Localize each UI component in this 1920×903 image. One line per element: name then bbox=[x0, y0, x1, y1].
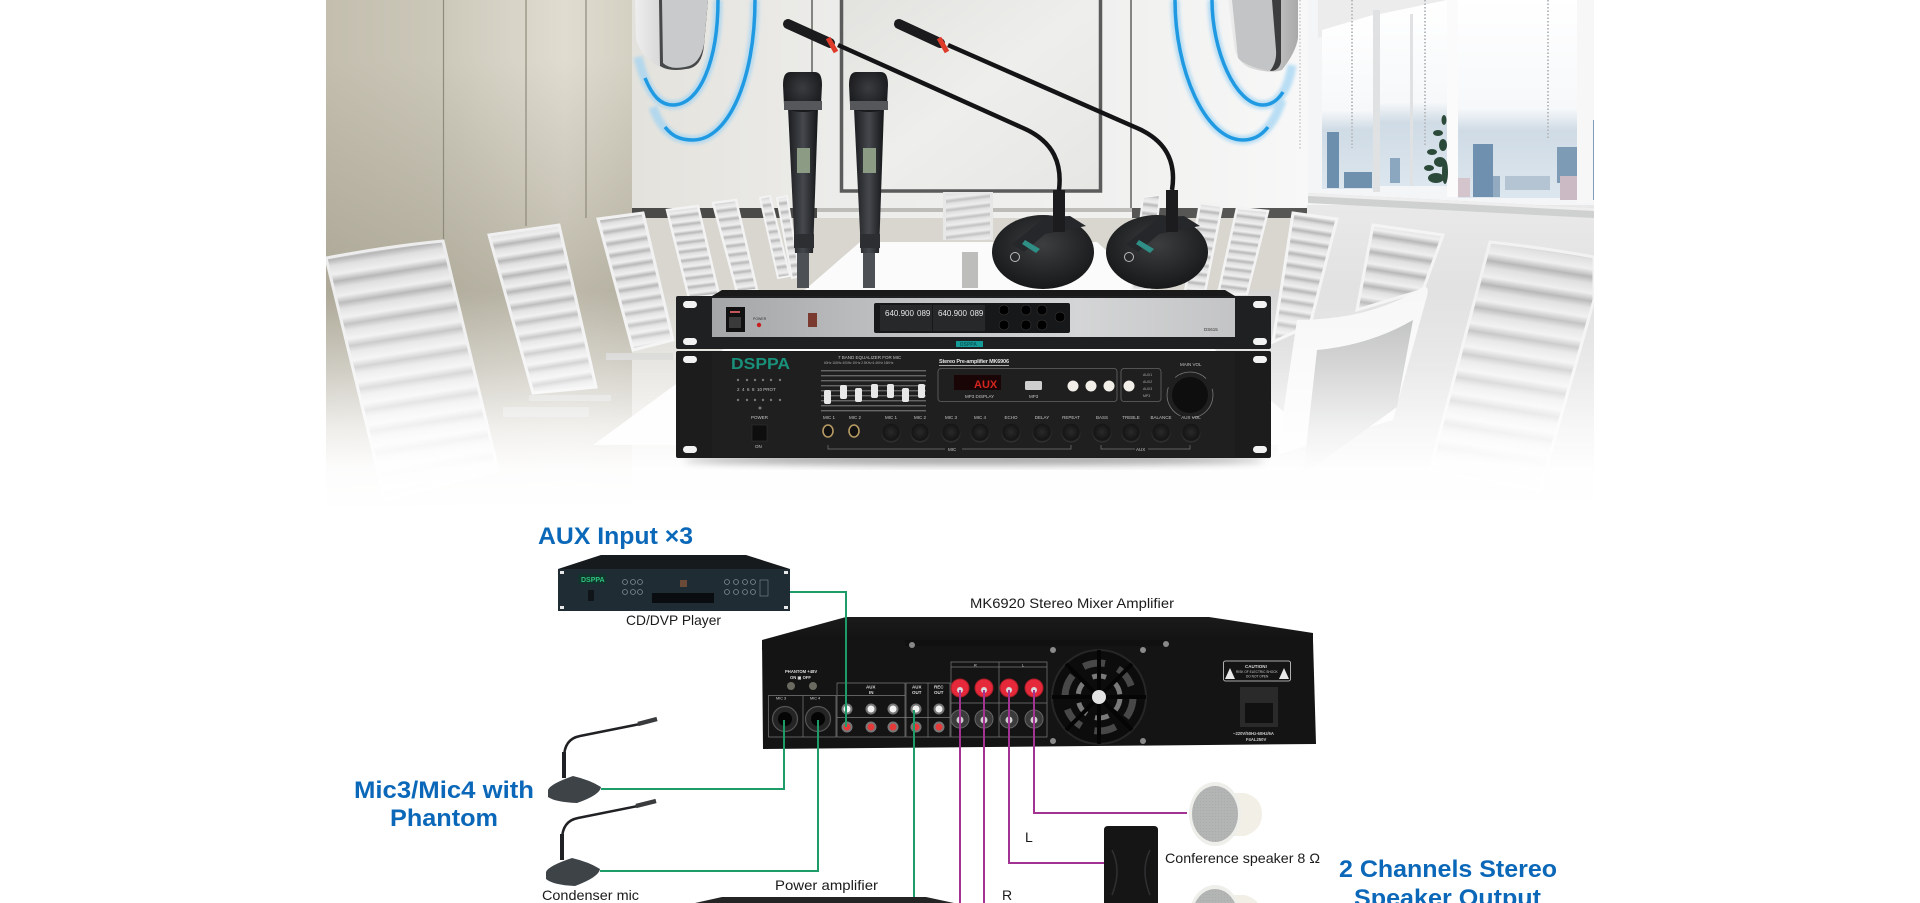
rack shadow bbox=[684, 455, 1264, 465]
control knobs: DELAY bbox=[1035, 415, 1049, 420]
XLR inputs: MIC 4 bbox=[810, 696, 820, 700]
heading: Mic3/Mic4 with Phantom: Phantom bbox=[390, 805, 498, 832]
connection diagram bbox=[354, 523, 1557, 903]
MK6920 stereo mixer amplifier rear panel bbox=[762, 617, 1316, 749]
power switch bbox=[726, 307, 745, 332]
mic and aux group brackets: MIC bbox=[948, 447, 957, 452]
control knobs: BALANCE bbox=[1150, 415, 1172, 420]
RCA connectors: AUX bbox=[912, 684, 922, 690]
caution label: RISK OF ELECTRIC SHOCK bbox=[1236, 670, 1278, 674]
mic and aux group brackets: AUX bbox=[1136, 447, 1145, 452]
wireless receiver rack unit: DS615 bbox=[1204, 327, 1218, 332]
brand logo: DSPPA bbox=[731, 356, 790, 373]
source selector: AUX2 bbox=[1143, 380, 1152, 384]
MK6920 label: MK6920 Stereo Mixer Amplifier bbox=[970, 595, 1174, 611]
gooseneck microphone 1 bbox=[788, 24, 1094, 289]
RCA connectors bbox=[837, 683, 950, 737]
green signal cables bbox=[600, 592, 914, 897]
condenser mic label: Condenser mic bbox=[542, 887, 639, 903]
pre-amp power switch: POWER bbox=[751, 415, 769, 420]
control knobs: MIC 4 bbox=[974, 415, 986, 420]
control knobs: MIC 1 bbox=[885, 415, 897, 420]
pre-amp power switch: ON bbox=[755, 444, 762, 449]
wireless receiver rack unit bbox=[676, 290, 1271, 349]
level LEDs bbox=[737, 379, 781, 410]
control knobs bbox=[882, 415, 1201, 442]
power inlet: F4AL250V bbox=[1246, 737, 1266, 742]
microphone 2 bbox=[849, 72, 888, 288]
control knobs: ECHO bbox=[1004, 415, 1018, 420]
caution label bbox=[1224, 661, 1290, 681]
L channel label: L bbox=[1025, 829, 1033, 845]
receiver display panel: 089 bbox=[970, 309, 984, 318]
power amplifier bbox=[695, 897, 954, 903]
right row of chairs bbox=[1133, 196, 1594, 418]
microphone jacks: MIC 2 bbox=[849, 415, 861, 420]
speaker terminals bbox=[951, 662, 1047, 737]
power inlet: ~220V/50Hz-60Hz/6A bbox=[1233, 731, 1274, 736]
level LEDs: 2 4 6 8 10 PROT bbox=[737, 387, 776, 392]
hero photo: conference room bbox=[326, 0, 1594, 456]
purple speaker cables bbox=[960, 690, 1187, 903]
source selector: MP3 bbox=[1143, 394, 1150, 398]
main volume knob bbox=[1167, 362, 1213, 418]
RCA connectors: IN bbox=[869, 690, 874, 695]
R channel label: R bbox=[1002, 887, 1012, 903]
MP3 panel: MP3 DISPLAY bbox=[965, 394, 994, 399]
conference speaker label: Conference speaker 8 Ω bbox=[1165, 850, 1320, 866]
RCA connectors: REC bbox=[934, 684, 944, 690]
receiver display panel: 640.900 bbox=[885, 309, 914, 318]
sound waves left bbox=[638, 0, 755, 140]
pre-amp power switch bbox=[751, 415, 769, 449]
control knobs: REPEAT bbox=[1062, 415, 1080, 420]
power inlet bbox=[1233, 687, 1278, 742]
conference table bbox=[593, 242, 1320, 445]
speaker terminals: R bbox=[974, 664, 977, 668]
heading: Mic3/Mic4 with Phantom: Mic3/Mic4 with bbox=[354, 777, 534, 804]
heading: Mic3/Mic4 with Phantom bbox=[354, 777, 534, 832]
caution label: CAUTION! bbox=[1245, 664, 1267, 669]
lower rack ears bbox=[683, 356, 1267, 453]
equalizer sliders: 60Hz 160Hz 400Hz 1KHz 2.5KHz 6.4KHz 16KHz bbox=[824, 361, 894, 365]
power LED bbox=[753, 317, 767, 327]
condenser microphone 2 bbox=[546, 801, 656, 886]
window wall with city view bbox=[1299, 0, 1594, 426]
mic and aux group brackets bbox=[828, 445, 1190, 452]
equalizer sliders bbox=[821, 355, 926, 415]
receiver display panel: 089 bbox=[917, 309, 931, 318]
back wall bbox=[632, 0, 1307, 416]
phantom switch: ON ▣ OFF bbox=[790, 675, 811, 680]
control knobs: MIC 3 bbox=[945, 415, 957, 420]
MP3 panel: MP3 bbox=[1029, 394, 1039, 399]
source selector: AUX1 bbox=[1143, 373, 1152, 377]
speaker terminals: L bbox=[1022, 664, 1024, 668]
model title: Stereo Pre-amplifier MK6906 bbox=[939, 359, 1009, 365]
sound waves right bbox=[1175, 0, 1292, 140]
power amplifier label: Power amplifier bbox=[775, 877, 878, 893]
condenser microphone 1 bbox=[548, 719, 657, 803]
XLR inputs bbox=[768, 696, 836, 737]
CD/DVP player label: CD/DVP Player bbox=[626, 612, 721, 628]
foreground white chair bbox=[1284, 287, 1428, 444]
phantom switch bbox=[785, 669, 817, 690]
phantom switch: PHANTOM +48V bbox=[785, 669, 817, 674]
main volume knob: MAIN VOL bbox=[1180, 362, 1202, 367]
heading: 2 channels stereo speaker output bbox=[1339, 856, 1557, 903]
teal logo badge bbox=[956, 341, 983, 348]
control knobs: AUX VOL bbox=[1181, 415, 1201, 420]
XLR inputs: MIC 3 bbox=[776, 696, 786, 700]
CD/DVP player bbox=[558, 555, 790, 611]
caution label: DO NOT OPEN bbox=[1246, 674, 1269, 678]
gooseneck conference microphones bbox=[788, 24, 1208, 289]
CD/DVP player: DSPPA bbox=[581, 577, 605, 584]
ceiling speaker 2 bbox=[1189, 885, 1262, 903]
teal logo badge: DSPPA bbox=[960, 342, 977, 348]
equalizer sliders: 7 BAND EQUALIZER FOR MIC bbox=[838, 355, 902, 360]
handheld wireless microphones bbox=[783, 72, 888, 288]
ceiling speaker 1 bbox=[1189, 782, 1262, 846]
RCA connectors: OUT bbox=[934, 690, 944, 695]
gooseneck microphone 2 bbox=[899, 24, 1208, 289]
left row of chairs bbox=[326, 195, 797, 452]
receiver display panel bbox=[874, 303, 1070, 333]
RCA connectors: AUX bbox=[866, 684, 876, 690]
control knobs: MIC 2 bbox=[914, 415, 926, 420]
MP3 panel: AUX bbox=[974, 379, 998, 391]
control knobs: BASS bbox=[1096, 415, 1108, 420]
heading: 2 channels stereo speaker output: 2 Channels Stereo bbox=[1339, 856, 1557, 883]
RCA connectors: OUT bbox=[912, 690, 922, 695]
whiteboard bbox=[842, 0, 1100, 191]
wall speaker left bbox=[635, 0, 708, 70]
left beige wall bbox=[326, 0, 632, 456]
power LED: POWER bbox=[753, 317, 767, 321]
MP3 panel bbox=[938, 368, 1117, 402]
source selector bbox=[1121, 368, 1161, 402]
receiver display panel: 640.900 bbox=[938, 309, 967, 318]
microphone jacks: MIC 1 bbox=[823, 415, 835, 420]
stereo pre-amplifier rack unit bbox=[676, 351, 1271, 458]
wall speaker black bbox=[1104, 826, 1158, 903]
microphone jacks bbox=[823, 415, 861, 437]
photo fade to white bbox=[326, 290, 1594, 512]
wall speaker right bbox=[1228, 0, 1298, 72]
table centre strip bbox=[962, 252, 978, 288]
IR window bbox=[808, 313, 817, 327]
far end chair bbox=[943, 192, 993, 240]
source selector: AUX3 bbox=[1143, 387, 1152, 391]
control knobs: TREBLE bbox=[1122, 415, 1140, 420]
cooling fan bbox=[1050, 647, 1146, 744]
microphone 1 bbox=[783, 72, 822, 288]
heading: AUX input: AUX Input ×3 bbox=[538, 523, 693, 550]
rack ears bbox=[683, 301, 1267, 345]
